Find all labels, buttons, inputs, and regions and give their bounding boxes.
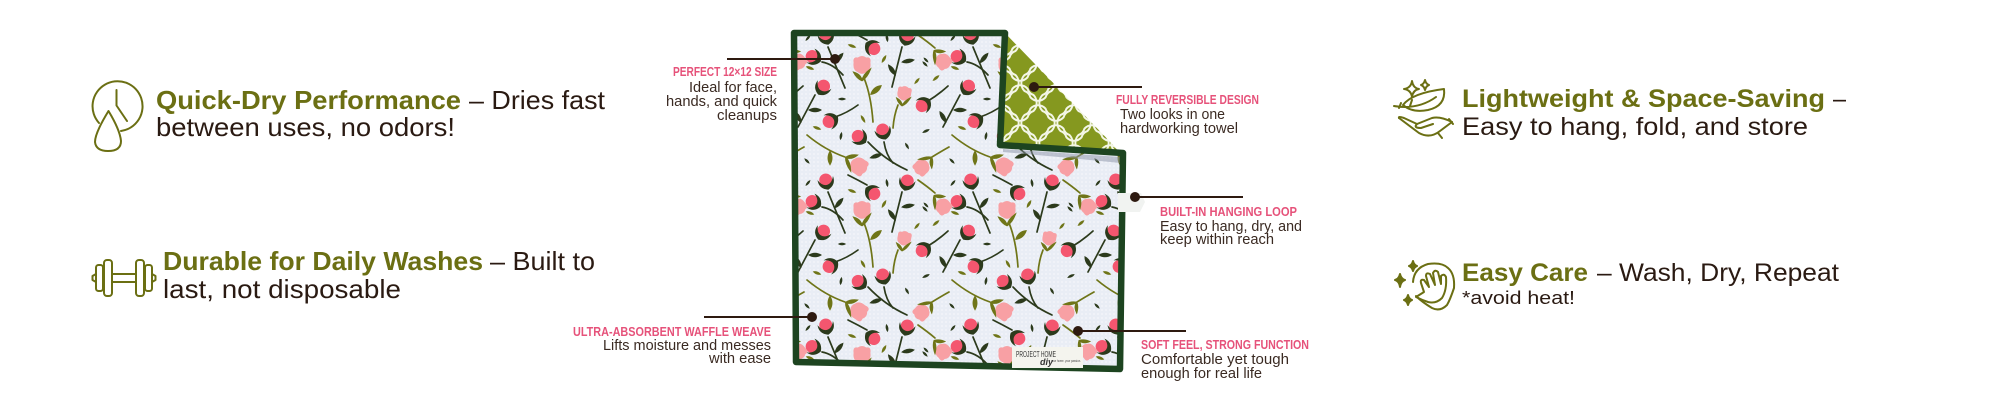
towel front face with floral print [794,33,1123,369]
reversible folded corner [1000,32,1120,152]
callout text: keep within reach [1160,231,1274,248]
callout text: with ease [708,350,771,367]
callout heading: BUILT-IN HANGING LOOP [1160,205,1297,219]
callout text: cleanups [717,107,777,124]
callout text [666,79,777,124]
callout: reversible design [1029,82,1259,137]
text: quick-dry description [156,85,606,142]
callout text: enough for real life [1141,365,1262,382]
panel: quick-dry feature [93,81,606,151]
callout text [1141,351,1289,382]
brand label: diy [1040,357,1054,367]
text: easy care description: *avoid heat! [1462,288,1575,308]
callout heading: SOFT FEEL, STRONG FUNCTION [1141,338,1309,352]
callout: perfect size [666,54,840,124]
text: durable description [163,246,595,304]
heading: easy care: Easy Care [1462,259,1588,287]
towel dark green binding [794,33,1123,369]
icon: feather over hand [1394,80,1453,138]
icon: clock and water drop [93,81,143,151]
text: quick-dry description: – Dries fast [469,85,606,115]
panel: durable feature [92,246,595,304]
text: durable description: last, not disposable [163,274,401,304]
leader line and dot [704,312,817,322]
callout text: hardworking towel [1120,120,1238,137]
callout text [1120,106,1238,137]
brand label: your home. your passion. [1051,359,1081,363]
callout text [1160,218,1302,248]
callout heading: ULTRA-ABSORBENT WAFFLE WEAVE [573,325,771,339]
text: durable description: – Built to [490,246,595,276]
text: easy care description [1462,259,1839,308]
leader line and dot [727,54,840,64]
callout text: Two looks in one [1120,106,1225,123]
panel: lightweight feature [1394,80,1846,141]
brand label: PROJECT HOME [1016,350,1056,359]
leader line and dot [1130,192,1243,202]
text: lightweight description [1462,85,1846,141]
callout: soft feel [1073,326,1309,382]
callout heading: FULLY REVERSIBLE DESIGN [1116,93,1259,107]
text: lightweight description: Easy to hang, fold, and store [1462,113,1808,141]
callout: hanging loop [1130,192,1302,248]
hanging loop [1118,193,1145,212]
callout text: Comfortable yet tough [1141,351,1289,368]
heading: quick-dry performance: Quick-Dry Performance [156,85,461,115]
callout text: Ideal for face, [689,79,777,96]
callout text: Easy to hang, dry, and [1160,218,1302,235]
callout heading: PERFECT 12×12 SIZE [673,65,777,79]
callout text: hands, and quick [666,93,777,110]
text: easy care description: – Wash, Dry, Repeat [1597,259,1839,287]
leader line and dot [1029,82,1142,92]
panel: easy care feature [1395,259,1839,309]
heading: lightweight and space-saving: Lightweight & Space-Saving [1462,85,1825,113]
heading: durable for daily washes: Durable for Daily Washes [163,246,483,276]
text: lightweight description: – [1833,85,1846,113]
callout: waffle weave [573,312,817,367]
towel photo illustration [794,32,1145,369]
callout text [603,337,771,367]
text: quick-dry description: between uses, no odors! [156,112,455,142]
brand label [1012,347,1083,368]
leader line and dot [1073,326,1186,336]
callout text: Lifts moisture and messes [603,337,771,354]
icon: dumbbell [92,260,156,296]
icon: hand wiping with sparkles [1395,261,1454,309]
